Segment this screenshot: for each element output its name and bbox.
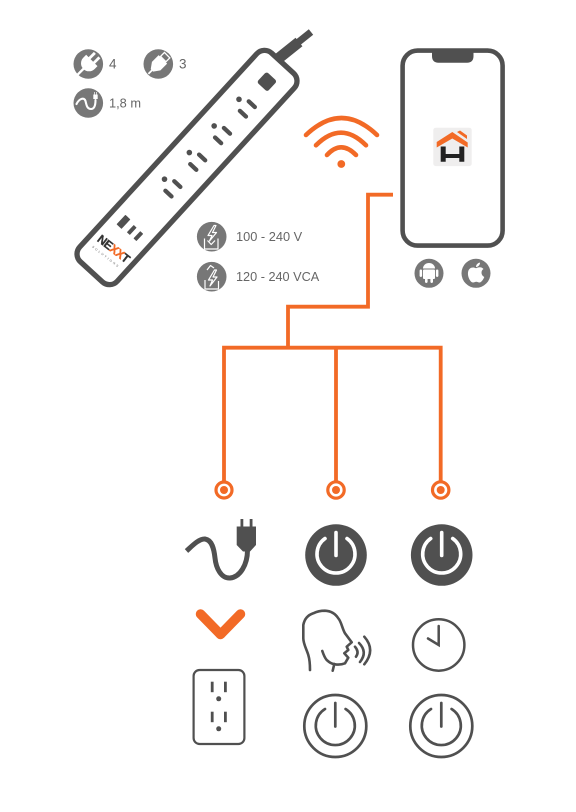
app icon (433, 128, 472, 166)
spec: usb ports (144, 49, 187, 79)
icon: clock (413, 619, 464, 671)
brand logo: SOLUTIONS (91, 245, 121, 269)
strip body (73, 46, 301, 289)
icon: android (414, 259, 444, 288)
icon: plug and cable (186, 519, 256, 578)
strip sockets and button (117, 68, 282, 242)
connector lines (224, 195, 441, 482)
spec: input voltage (197, 222, 303, 252)
node: left (216, 482, 232, 498)
smartphone (403, 50, 503, 246)
icon: wall outlet (194, 670, 244, 744)
spec: output voltage: 120 - 240 VCA (236, 270, 320, 284)
spec: outlets: 4 (109, 57, 117, 72)
icon: power off, voice (304, 695, 366, 757)
spec: input voltage: 100 - 240 V (236, 229, 303, 244)
node: centre (328, 482, 344, 498)
arrow: down chevron (200, 614, 240, 634)
icon: power on, app (305, 524, 367, 586)
spec: output voltage (197, 262, 320, 292)
power strip (73, 32, 311, 289)
spec: cord length (74, 88, 141, 118)
spec: usb ports: 3 (179, 57, 187, 72)
icon: apple (462, 259, 490, 288)
spec: cord length: 1,8 m (109, 96, 141, 111)
power cord of strip (279, 32, 311, 58)
node: right (432, 482, 449, 498)
icon: power off, schedule (410, 695, 472, 757)
wifi icon (306, 118, 377, 168)
spec: outlets (71, 49, 117, 81)
brand logo: NEXXT (95, 232, 133, 267)
icon: voice command (303, 611, 370, 671)
icon: power on, schedule (411, 524, 473, 586)
